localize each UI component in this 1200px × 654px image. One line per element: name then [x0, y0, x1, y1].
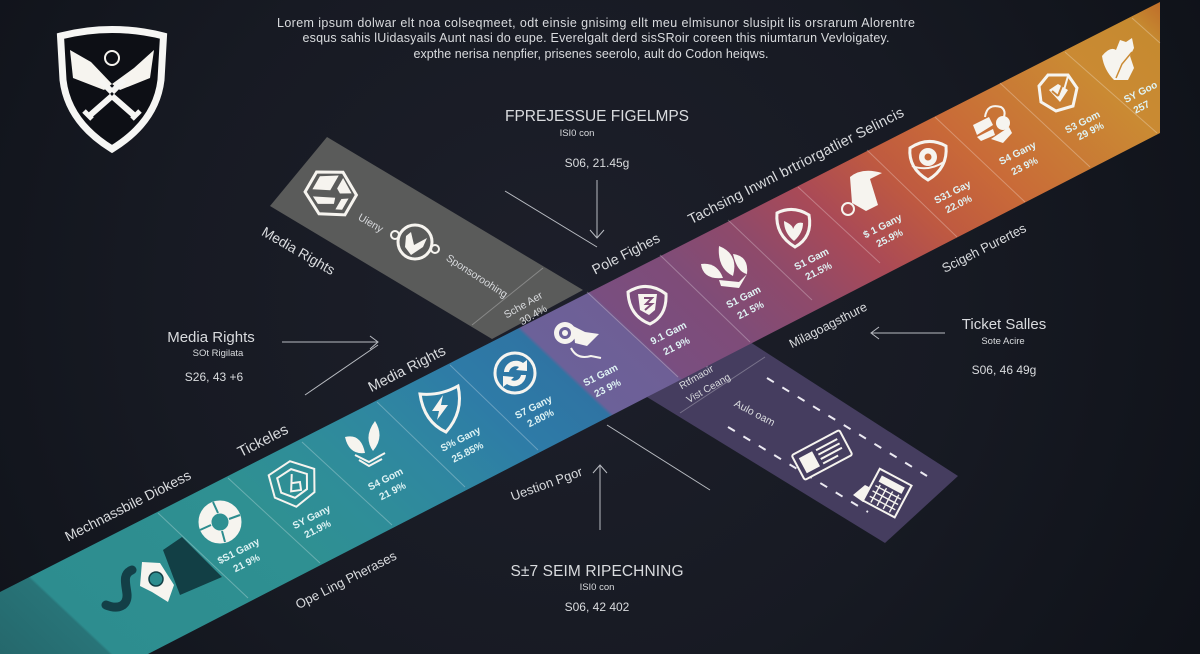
- icon: ring: [200, 502, 240, 542]
- value labels in band: 21 9%: [378, 480, 408, 503]
- value labels in band: 23 9%: [593, 377, 623, 400]
- value labels in band: S7 Gany: [514, 394, 555, 422]
- icon: shield with bolt: [420, 386, 460, 432]
- value labels in band: 22.0%: [944, 193, 974, 216]
- icon: shield heart: [777, 209, 810, 247]
- value labels in band: 257: [1132, 99, 1152, 116]
- callout: right ticket sales: [962, 316, 1046, 377]
- band captions: Tickeles: [235, 421, 291, 461]
- callout: bottom center: S±7 SEIM RIPECHNING: [510, 563, 684, 580]
- value labels in band: 21.5%: [804, 260, 834, 283]
- callout: top center: ISI0 con: [560, 128, 594, 139]
- icon: mug and ring: [842, 171, 882, 215]
- value labels in band: S31 Gay: [933, 179, 973, 207]
- value labels in band: S1 Gam: [582, 362, 620, 389]
- callout: top center: FPREJESSUE FIGELMPS: [505, 108, 689, 125]
- icon: shield: [628, 286, 666, 324]
- value labels in band: 25.9%: [875, 227, 905, 250]
- callout: left media rights: SOt Rigilata: [193, 348, 244, 359]
- icon: glove: [973, 106, 1012, 143]
- intro paragraph: Lorem ipsum dolwar elt noa colseqmeet, odt einsie gnisimg ellt meu elmisunor slusipit lis orsrarum Alorentre: [277, 16, 915, 30]
- callout: bottom center: [510, 563, 684, 614]
- icon: hex shield: [267, 458, 319, 510]
- value labels in band: SY Goo: [1122, 80, 1159, 106]
- icon: whistle: [554, 322, 601, 358]
- value labels in band: 21 5%: [736, 299, 766, 322]
- value labels in band: S4 Gom: [367, 466, 405, 493]
- label: Aulo oam: Aulo oam: [732, 398, 777, 429]
- logo: shield with crossed swords: [60, 30, 164, 149]
- band captions: Pole Fighes: [589, 230, 662, 277]
- value labels in band: 2.80%: [526, 407, 556, 430]
- value labels in band: 21.9%: [303, 518, 333, 541]
- intro paragraph: [277, 16, 915, 61]
- value labels in band: [216, 80, 1159, 575]
- callout: right ticket sales: S06, 46 49g: [972, 363, 1036, 377]
- value labels in band: S3 Gom: [1064, 109, 1102, 136]
- band captions: Ope Ling Pherases: [293, 548, 399, 612]
- value labels in band: $S1 Gany: [216, 536, 262, 567]
- callout: left media rights: [167, 329, 255, 384]
- callout: top center: S06, 21.45g: [565, 156, 629, 170]
- value labels in band: S1 Gam: [793, 246, 831, 273]
- value labels in band: 9.1 Gam: [649, 320, 689, 348]
- value labels in band: 21 9%: [232, 552, 262, 575]
- icon: helmet shield: [910, 141, 946, 180]
- band captions: Milagoagsthure: [787, 300, 869, 351]
- value labels in band: 25.85%: [450, 440, 486, 465]
- icon: calculator and pencil: [853, 469, 912, 517]
- value labels in band: SY Gany: [291, 503, 333, 532]
- label: Uieny: Uieny: [356, 211, 386, 236]
- icon: hexagon crate: [299, 161, 363, 225]
- value labels in band: S% Gany: [439, 425, 483, 455]
- label: Vist Ceang: Vist Ceang: [685, 372, 733, 406]
- panel: purple diagonal strip: [647, 342, 958, 543]
- callout: top center: [505, 108, 689, 170]
- band captions: Uestion Pgor: [509, 464, 585, 504]
- label: Sche Aer share on grey strip: 30.4%: [518, 303, 549, 328]
- value labels in band: S4 Gany: [998, 140, 1039, 168]
- icon: lotus: [701, 246, 747, 288]
- icon: dark tag and gear: [106, 537, 222, 607]
- icon: recycle circle: [495, 353, 535, 393]
- value labels in band: $ 1 Gany: [862, 212, 904, 241]
- arrow: bottom callout: [593, 425, 710, 530]
- icon: ticket: [792, 430, 852, 480]
- band captions: Tachsing Inwnl brtriorgatlier Selincis: [686, 105, 907, 228]
- band captions: Mechnassbile Diokess: [62, 467, 193, 544]
- arrow: right callout: [871, 327, 945, 339]
- label: Sponsoroohing: Sponsoroohing: [444, 252, 510, 301]
- icon: leaves: [345, 421, 385, 466]
- value labels in band: 23 9%: [1010, 155, 1040, 178]
- band captions: [62, 105, 1029, 612]
- callout: left media rights: S26, 43 +6: [185, 370, 244, 384]
- intro paragraph: expthe nerisa nenpfier, prisenes seerolo, ault do Codon heiqws.: [414, 47, 768, 61]
- arrow: left callout: [282, 336, 378, 395]
- callout: left media rights: Media Rights: [167, 329, 255, 346]
- callout: right ticket sales: Sote Acire: [981, 336, 1025, 347]
- callout: bottom center: ISI0 con: [580, 582, 614, 593]
- value labels in band: 21 9%: [662, 335, 692, 358]
- value labels in band: S1 Gam: [725, 284, 763, 311]
- band captions: Media Rights: [259, 223, 338, 278]
- label: Rtfmaoir: Rtfmaoir: [678, 363, 716, 392]
- callout: right ticket sales: Ticket Salles: [962, 316, 1046, 333]
- icon: squirrel shape: [1102, 38, 1134, 80]
- band captions: Media Rights: [366, 343, 449, 396]
- band captions: Scigeh Purertes: [939, 220, 1029, 276]
- intro paragraph: esqus sahis lUidasyails Aunt nasi do eupe. Everelgalt derd sisSRoir coreen this niumtarun Vevloigatey.: [302, 31, 890, 45]
- icon: round target: [1039, 75, 1077, 111]
- callout: bottom center: S06, 42 402: [565, 600, 630, 614]
- icon: round emblem: [391, 225, 439, 259]
- value labels in band: 29 9%: [1076, 120, 1106, 143]
- label: Sche Aer share on grey strip: Sche Aer: [502, 289, 545, 321]
- arrow: top callout: [505, 180, 604, 247]
- panel: grey diagonal strip: [270, 137, 583, 339]
